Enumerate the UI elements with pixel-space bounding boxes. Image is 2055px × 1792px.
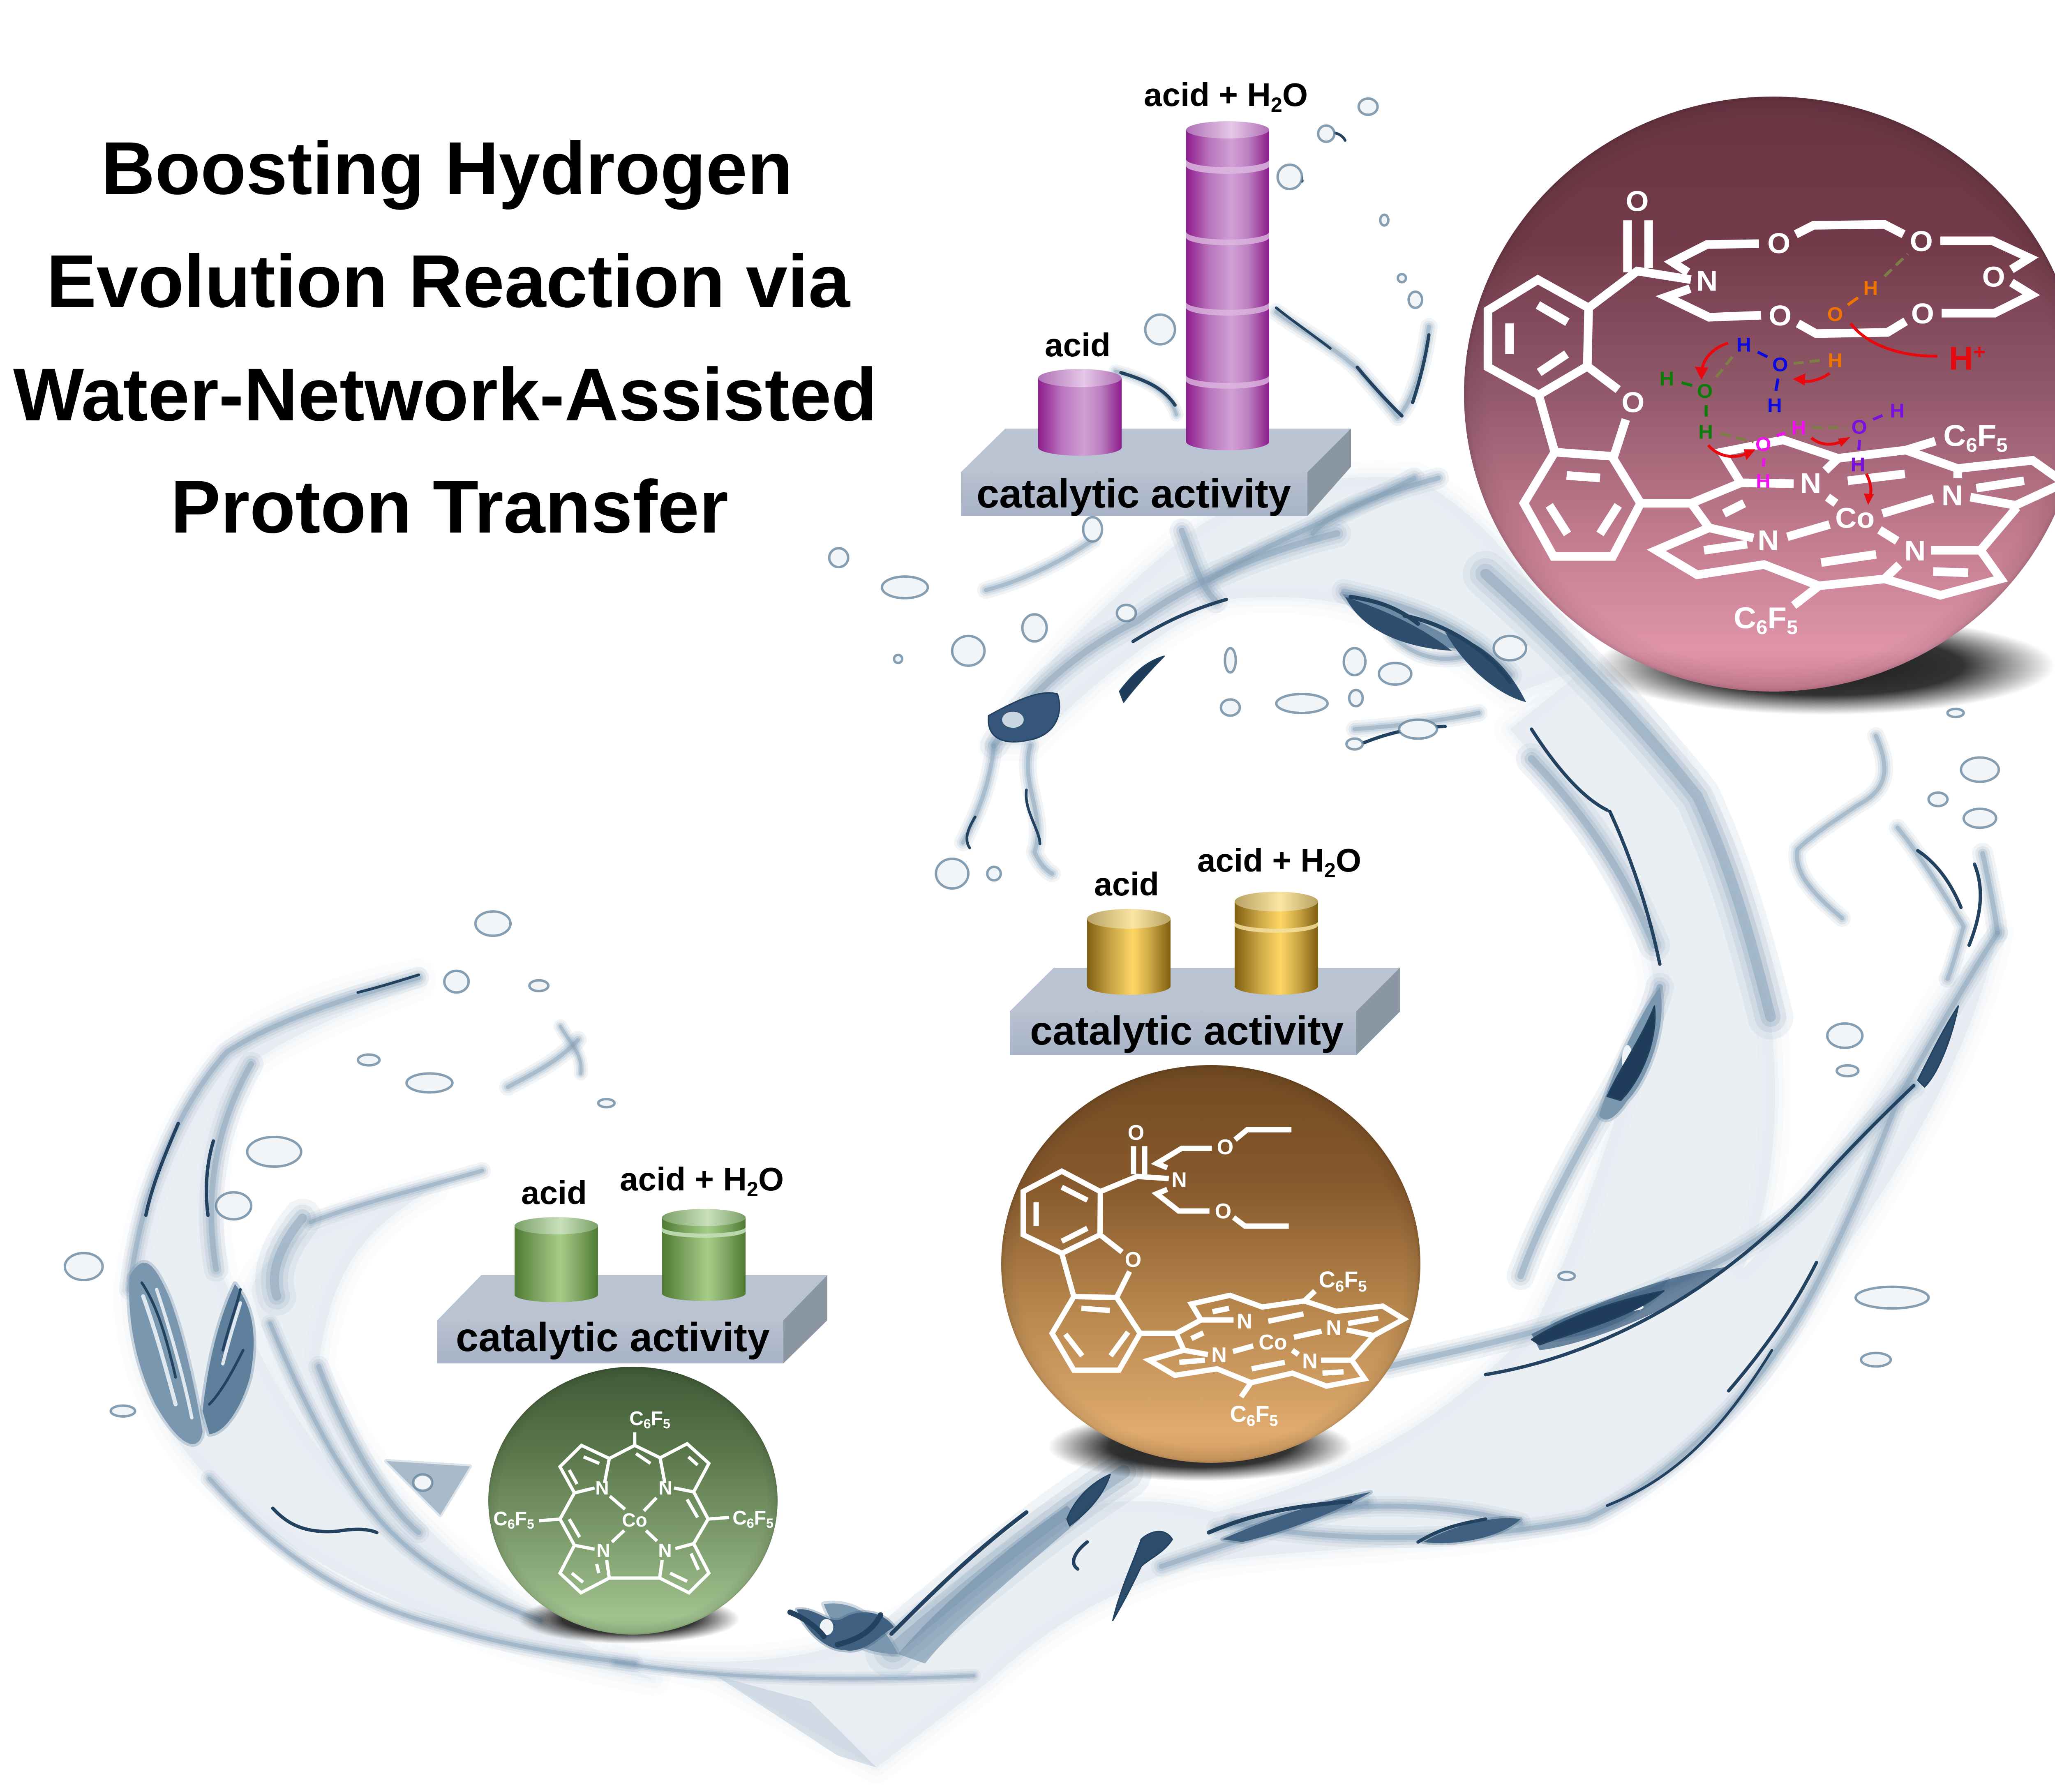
atom labels: gold sphere: N bbox=[1326, 1316, 1342, 1340]
molecule: crown-ether hangman corrole: F bbox=[1977, 419, 1996, 452]
label: catalytic activity: catalytic activity bbox=[456, 1315, 770, 1360]
title bbox=[13, 126, 877, 549]
water network: coloured hydrogen-bonded water molecules bbox=[1660, 254, 1908, 492]
molecule: crown-ether hangman corrole bbox=[1488, 185, 2055, 639]
molecule: crown-ether hangman corrole: O bbox=[1910, 226, 1933, 258]
water network: coloured hydrogen-bonded water molecules: H bbox=[1756, 470, 1771, 492]
molecule: crown-ether hangman corrole: C bbox=[1734, 601, 1756, 635]
atom labels: green sphere: F bbox=[515, 1508, 527, 1530]
shadow: pink sphere bbox=[1595, 616, 2055, 715]
water network: coloured hydrogen-bonded water molecules: O bbox=[1755, 434, 1771, 455]
water network: coloured hydrogen-bonded water molecules: H bbox=[1736, 334, 1751, 356]
atom labels: green sphere: F bbox=[754, 1507, 766, 1529]
atom labels: gold sphere: O bbox=[1128, 1121, 1144, 1145]
title: Proton Transfer bbox=[171, 465, 728, 549]
atom labels: green sphere: 5 bbox=[527, 1517, 534, 1531]
bar: acid (purple) bbox=[1038, 369, 1122, 456]
atom labels: gold sphere bbox=[1125, 1121, 1367, 1430]
panel: catalytic activity, parent corrole (green bars) bbox=[437, 1161, 827, 1363]
label: acid + H2O: 2 bbox=[1271, 93, 1282, 116]
title: Water-Network-Assisted bbox=[13, 353, 877, 436]
bar: acid + water (purple, stacked) bbox=[1186, 121, 1269, 450]
atom labels: green sphere bbox=[493, 1408, 774, 1561]
label: acid + H2O: O bbox=[1282, 76, 1308, 113]
panel: catalytic activity, diether catalyst (gold bars) bbox=[1010, 842, 1400, 1055]
molecule: crown-ether hangman corrole: O bbox=[1911, 298, 1934, 330]
atom labels: gold sphere: N bbox=[1302, 1349, 1318, 1373]
water network: coloured hydrogen-bonded water molecules: H bbox=[1851, 454, 1865, 476]
water network: coloured hydrogen-bonded water molecules: H bbox=[1698, 421, 1713, 443]
label: acid: acid bbox=[1045, 327, 1111, 363]
atom labels: gold sphere: F bbox=[1255, 1401, 1269, 1427]
molecule: cobalt corrole bbox=[539, 1432, 729, 1593]
molecule: crown-ether hangman corrole: 5 bbox=[1787, 617, 1798, 639]
atom labels: green sphere: N bbox=[658, 1477, 672, 1499]
water network: coloured hydrogen-bonded water molecules: H bbox=[1792, 417, 1806, 439]
shadow: green sphere bbox=[518, 1594, 740, 1644]
atom labels: green sphere: 5 bbox=[663, 1416, 670, 1431]
left swirl mottled lumps bbox=[129, 1263, 203, 1444]
molecule: crown-ether hangman corrole: 6 bbox=[1966, 434, 1977, 456]
label: acid: acid bbox=[521, 1174, 587, 1211]
water network: coloured hydrogen-bonded water molecules: H bbox=[1767, 395, 1782, 417]
atom labels: green sphere: N bbox=[595, 1477, 609, 1499]
platform bbox=[961, 429, 1351, 516]
molecule: crown-ether hangman corrole: O bbox=[1982, 261, 2005, 293]
molecule: crown-ether hangman corrole: N bbox=[1942, 480, 1963, 512]
label: acid + H2O: O bbox=[758, 1161, 784, 1197]
panel: catalytic activity, water-network catalyst (purple bars) bbox=[961, 76, 1351, 516]
atom labels: gold sphere: O bbox=[1215, 1199, 1231, 1223]
atom labels: gold sphere: 5 bbox=[1269, 1412, 1278, 1430]
label: acid + H2O: 2 bbox=[747, 1178, 758, 1201]
bar: acid + water (green) bbox=[662, 1209, 746, 1301]
molecule: crown-ether hangman corrole: N bbox=[1904, 535, 1926, 567]
atom labels: green sphere: C bbox=[732, 1507, 747, 1529]
atom labels: gold sphere: 5 bbox=[1358, 1278, 1367, 1295]
molecule: crown-ether hangman corrole: O bbox=[1767, 228, 1790, 260]
atom labels: green sphere: N bbox=[596, 1540, 610, 1561]
atom labels: green sphere: 6 bbox=[508, 1517, 515, 1531]
sphere: green, parent cobalt corrole bbox=[488, 1367, 778, 1635]
atom labels: green sphere: 6 bbox=[644, 1416, 651, 1431]
atom labels: gold sphere: N bbox=[1211, 1343, 1227, 1367]
label: acid + H2O: 2 bbox=[1324, 859, 1336, 882]
atom labels: gold sphere: O bbox=[1217, 1135, 1233, 1159]
molecule: crown-ether hangman corrole: N bbox=[1800, 468, 1821, 500]
arrows: proton relay, with H+ label: H bbox=[1949, 341, 1973, 377]
water network: coloured hydrogen-bonded water molecules: O bbox=[1827, 304, 1843, 325]
molecule: crown-ether hangman corrole: O bbox=[1621, 387, 1644, 419]
molecule: crown-ether hangman corrole: O bbox=[1769, 300, 1792, 332]
molecule: crown-ether hangman corrole: N bbox=[1757, 525, 1779, 557]
atom labels: gold sphere: C bbox=[1230, 1401, 1247, 1427]
atom labels: green sphere: C bbox=[493, 1508, 508, 1530]
atom labels: gold sphere: F bbox=[1344, 1266, 1358, 1292]
water network: coloured hydrogen-bonded water molecules: H bbox=[1828, 350, 1843, 371]
label: catalytic activity: catalytic activity bbox=[1030, 1008, 1344, 1053]
water network: coloured hydrogen-bonded water molecules: H bbox=[1890, 400, 1905, 422]
bar: acid + water (gold) bbox=[1235, 892, 1318, 995]
atom labels: gold sphere: N bbox=[1237, 1310, 1252, 1333]
molecule: crown-ether hangman corrole: F bbox=[1767, 601, 1787, 635]
water network: coloured hydrogen-bonded water molecules: O bbox=[1851, 416, 1867, 438]
bar: acid (green) bbox=[515, 1217, 598, 1302]
molecule: diether hangman corrole bbox=[1023, 1130, 1404, 1397]
platform bbox=[1010, 968, 1400, 1055]
atom labels: green sphere: 6 bbox=[747, 1516, 754, 1531]
bar: acid (gold) bbox=[1087, 909, 1171, 995]
atom labels: green sphere: Co bbox=[622, 1509, 647, 1531]
water network: coloured hydrogen-bonded water molecules: O bbox=[1697, 381, 1713, 402]
molecule: crown-ether hangman corrole: O bbox=[1626, 185, 1649, 217]
water network: coloured hydrogen-bonded water molecules: H bbox=[1863, 277, 1878, 299]
sphere: pink, crown-ether catalyst with water network bbox=[1464, 97, 2055, 692]
title: Evolution Reaction via bbox=[46, 239, 851, 323]
atom labels: green sphere: N bbox=[658, 1540, 672, 1561]
atom labels: gold sphere: O bbox=[1125, 1248, 1141, 1272]
arrows: proton relay, with H+ label: + bbox=[1973, 340, 1986, 363]
atom labels: gold sphere: 6 bbox=[1247, 1412, 1255, 1430]
atom labels: green sphere: 5 bbox=[766, 1516, 774, 1531]
atom labels: gold sphere: N bbox=[1171, 1168, 1187, 1192]
molecule: crown-ether hangman corrole: C bbox=[1943, 419, 1966, 452]
label: acid + H2O: acid + H bbox=[620, 1161, 747, 1197]
arrows: proton relay, with H+ label bbox=[1695, 323, 1986, 505]
molecule: crown-ether hangman corrole: 6 bbox=[1756, 617, 1767, 639]
atom labels: green sphere: F bbox=[651, 1408, 663, 1430]
title: Boosting Hydrogen bbox=[101, 126, 793, 210]
molecule: crown-ether hangman corrole: N bbox=[1696, 265, 1718, 297]
label: acid + H2O: acid + H bbox=[1144, 76, 1271, 113]
water network: coloured hydrogen-bonded water molecules: O bbox=[1772, 354, 1788, 376]
water network: coloured hydrogen-bonded water molecules: H bbox=[1660, 368, 1674, 390]
label: acid + H2O: O bbox=[1336, 842, 1361, 879]
label: acid + H2O: acid + H bbox=[1197, 842, 1324, 879]
atom labels: gold sphere: 6 bbox=[1335, 1278, 1344, 1295]
platform bbox=[437, 1275, 827, 1363]
atom labels: gold sphere: Co bbox=[1258, 1331, 1287, 1354]
molecule: crown-ether hangman corrole: 5 bbox=[1996, 434, 2008, 456]
label: catalytic activity: catalytic activity bbox=[977, 471, 1291, 516]
sphere: gold, diether amide catalyst bbox=[1001, 1065, 1420, 1463]
shadow: gold sphere bbox=[1048, 1411, 1352, 1481]
molecule: crown-ether hangman corrole: Co bbox=[1835, 503, 1875, 534]
label: acid: acid bbox=[1094, 866, 1159, 902]
atom labels: green sphere: C bbox=[629, 1408, 644, 1430]
atom labels: gold sphere: C bbox=[1319, 1266, 1335, 1292]
